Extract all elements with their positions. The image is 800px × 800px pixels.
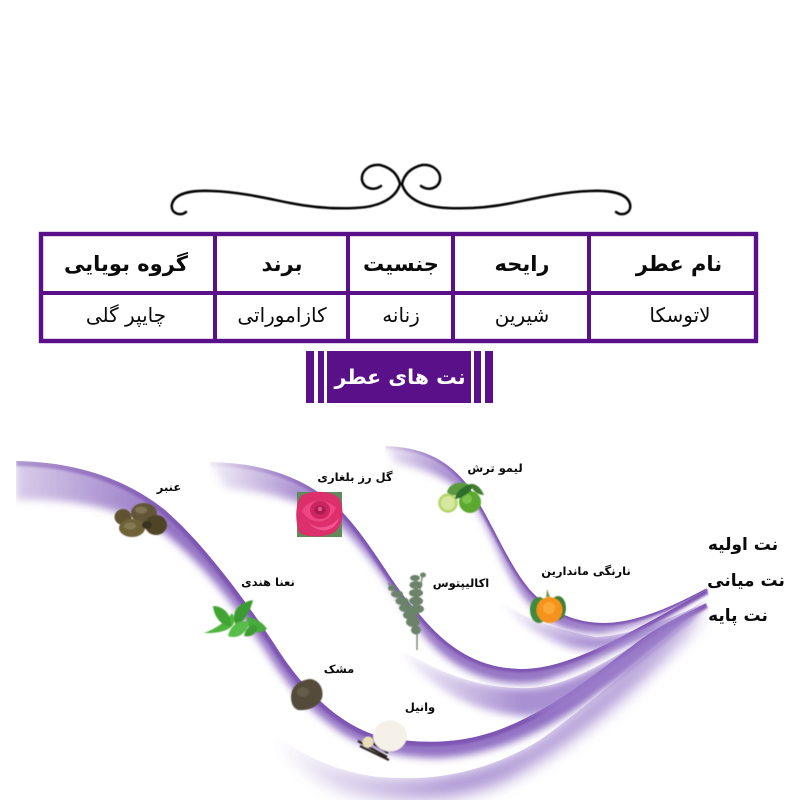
label: bulgarian rose: گل رز بلغاری: [317, 470, 393, 484]
chart: middle note ribbon lower: [400, 600, 705, 716]
table header row: [64, 251, 722, 276]
icon: rose: [296, 492, 342, 537]
table header row: جنسیت: [363, 252, 439, 276]
label: musk: مشک: [324, 662, 354, 676]
label: vanilla: وانیل: [405, 700, 435, 715]
chart: base note ribbon lower: [275, 607, 706, 799]
legend: top notes: نت اولیه: [708, 535, 778, 555]
chart: top note ribbon lower: [500, 600, 703, 650]
legend: middle notes: نت میانی: [707, 571, 785, 591]
icon: musk: [291, 679, 322, 710]
chart: middle note ribbon: [210, 462, 707, 683]
table value row: کازاموراتی: [237, 303, 327, 327]
label: mandarin orange: نارنگی ماندارین: [541, 564, 631, 578]
icon: vanilla: [358, 720, 407, 760]
heading: perfume notes banner: [306, 351, 493, 403]
icon: amber stones: [114, 503, 167, 537]
label: lime: لیمو ترش: [467, 461, 523, 476]
table value row: لاتوسکا: [649, 303, 711, 327]
chart: top note ribbon: [385, 446, 707, 633]
label: eucalyptus: اکالیپتوس: [433, 576, 489, 591]
table header row: برند: [262, 252, 302, 276]
legend: note levels: [707, 535, 785, 626]
table value row: چایپر گلی: [86, 303, 166, 328]
chart: base note ribbon: [16, 461, 706, 758]
table value row: زنانه: [382, 303, 420, 327]
table value row: [86, 303, 711, 328]
label: indian mint: نعنا هندی: [241, 575, 295, 589]
icon: mint leaves: [204, 600, 267, 637]
icon: eucalyptus: [388, 572, 426, 650]
table value row: شیرین: [495, 303, 549, 327]
ornament: flourish: [172, 165, 630, 214]
table header row: گروه بویایی: [64, 251, 189, 276]
label: amber: عنبر: [156, 480, 181, 494]
heading: perfume notes banner: نت های عطر: [333, 365, 466, 389]
table header row: نام عطر: [635, 252, 722, 276]
icon: lime: [438, 483, 484, 513]
table: perfume specifications: [41, 234, 756, 341]
icon: mandarin orange: [530, 589, 566, 623]
legend: base notes: نت پایه: [708, 606, 768, 626]
table header row: رایحه: [494, 252, 550, 276]
